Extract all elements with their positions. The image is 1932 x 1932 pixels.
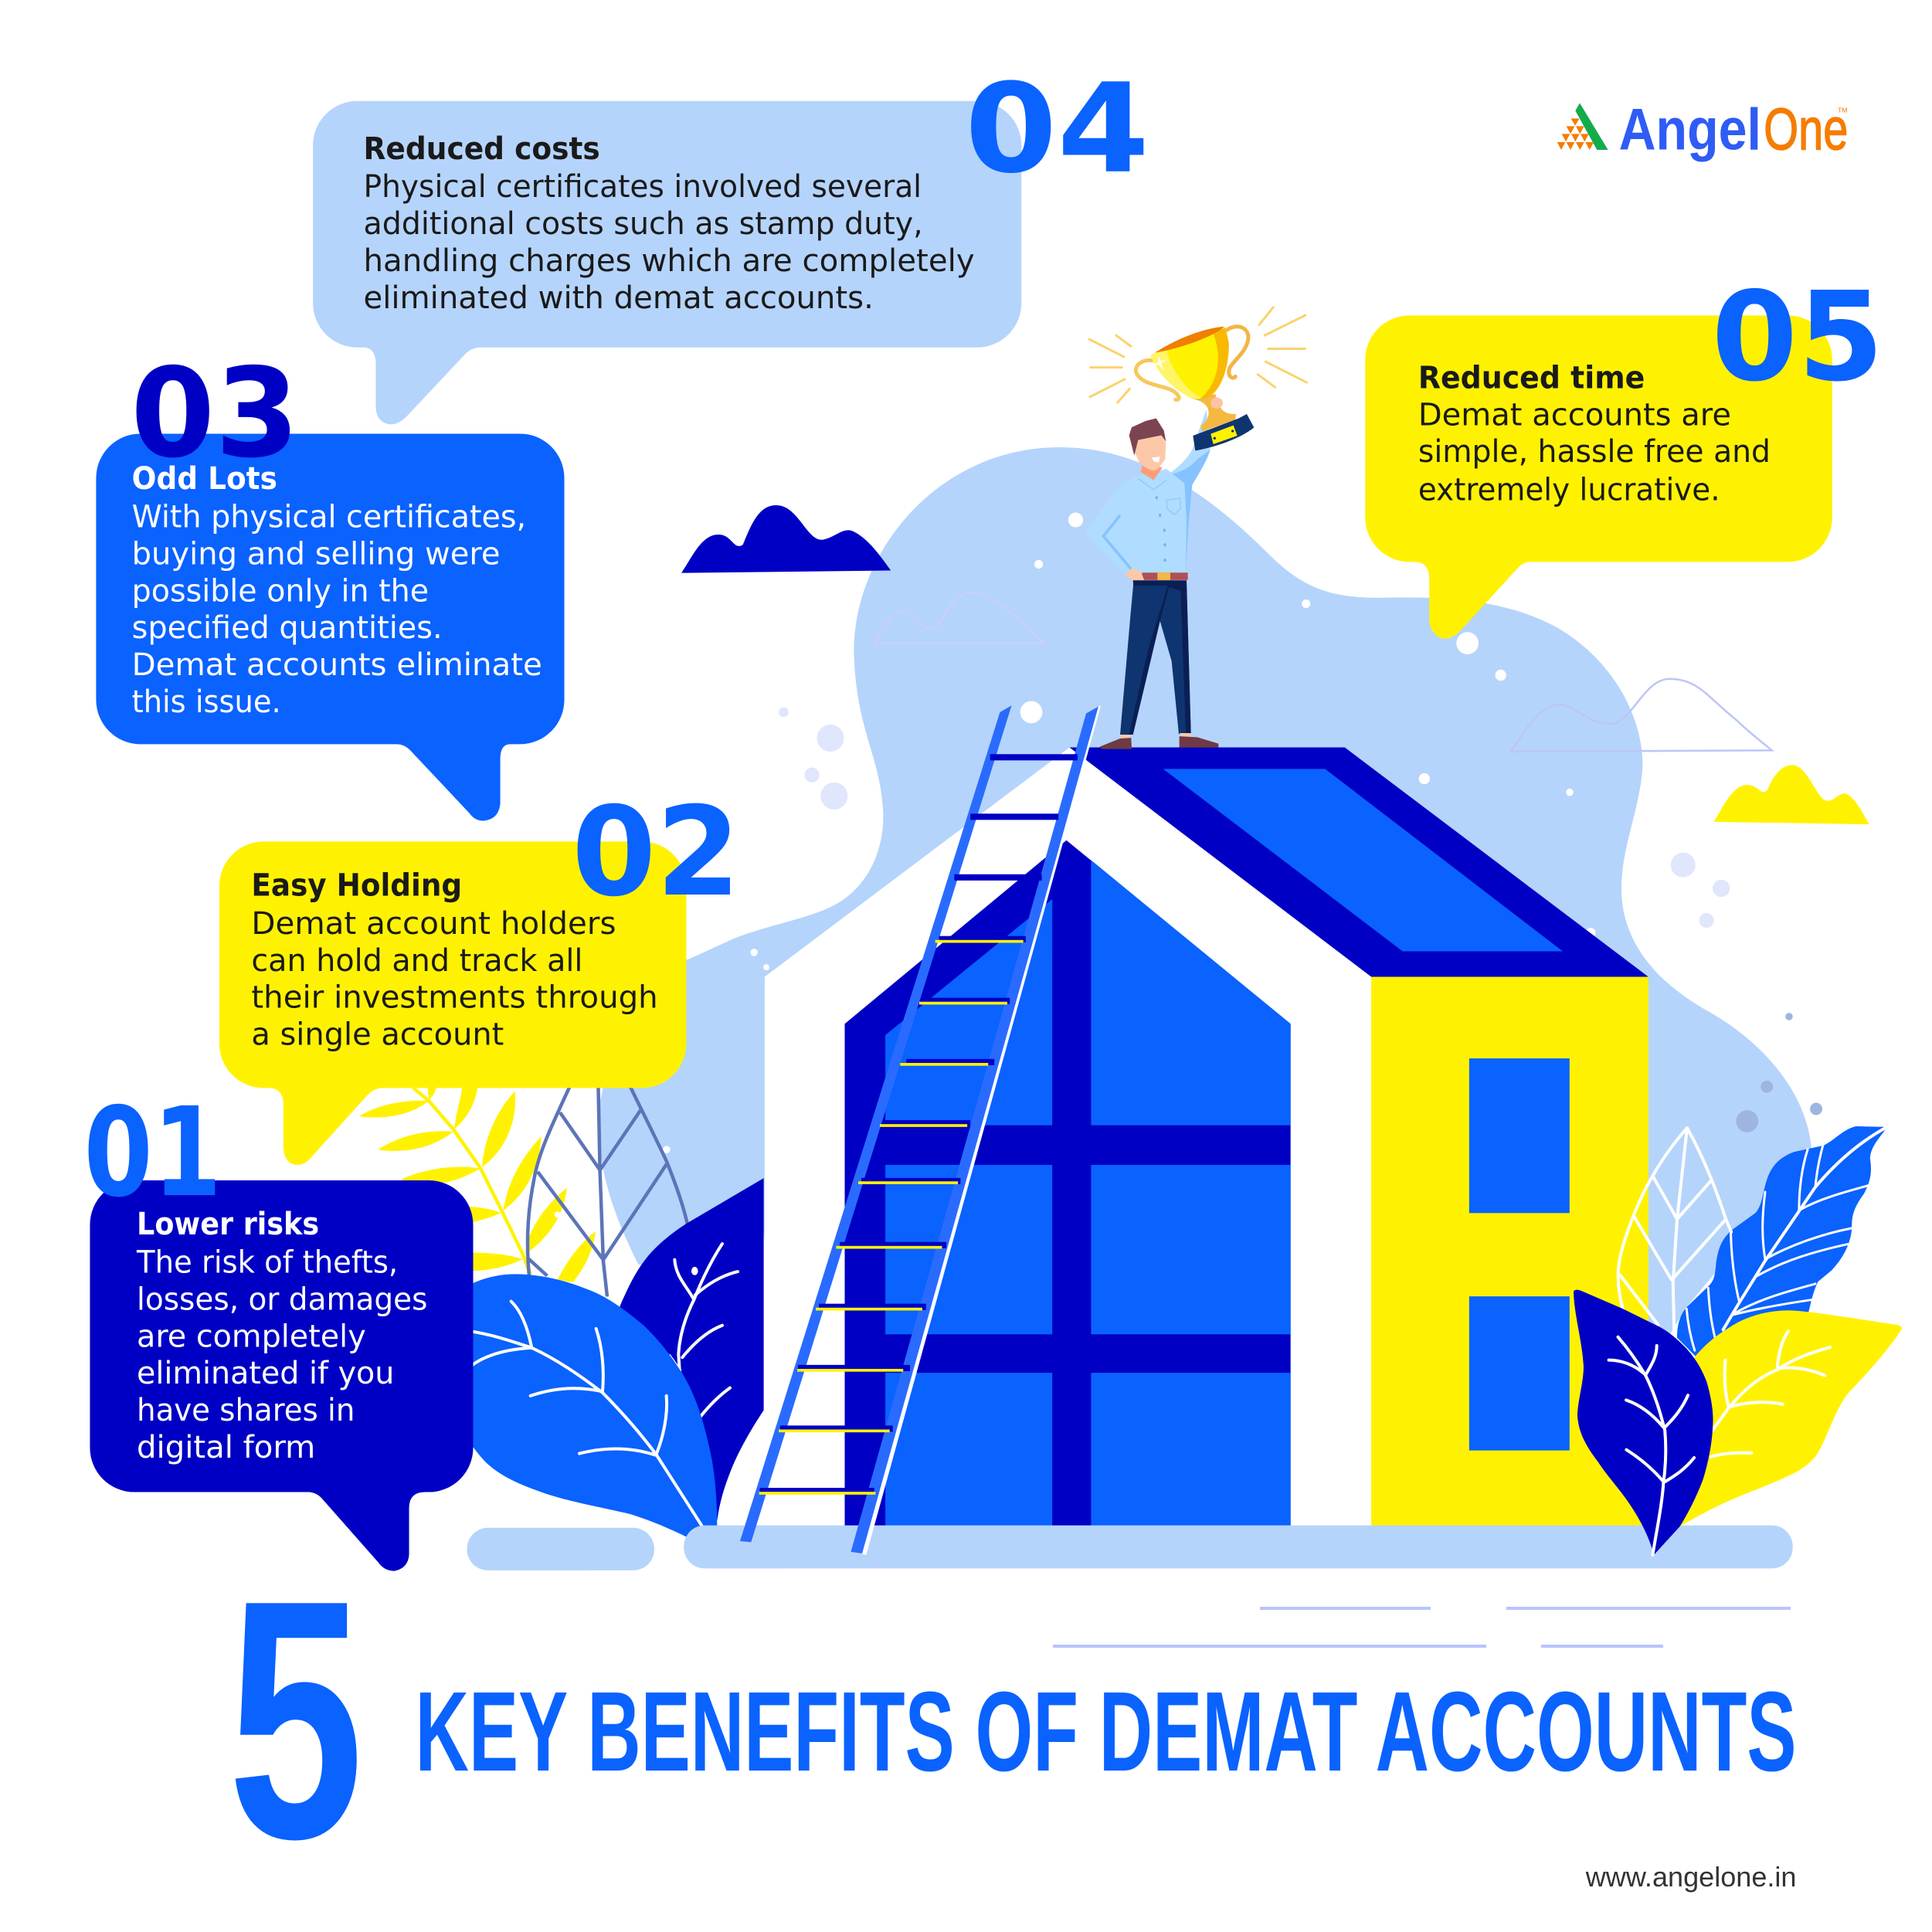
bubble 05: reduced time: Reduced time [1418, 360, 1645, 396]
big numeral 5: 5 [228, 1530, 364, 1910]
bubble 04: reduced costs: 04 [965, 57, 1149, 201]
raised arm [1166, 409, 1210, 485]
website url: www.angelone.in [1585, 1862, 1797, 1893]
bubble 01: lower risks [83, 1081, 473, 1571]
belt [1142, 572, 1188, 580]
bubble 04: reduced costs: Reduced costs [364, 131, 600, 167]
bubble 01: lower risks: losses, or damages [137, 1282, 427, 1317]
house [765, 747, 1648, 1528]
shirt [1084, 469, 1187, 575]
blue feather leaf [1677, 1126, 1887, 1356]
trousers [1120, 582, 1191, 735]
bubble 01: lower risks: eliminated if you [137, 1356, 394, 1391]
bubble 05: reduced time: simple, hassle free and [1418, 434, 1771, 470]
dark cloud [681, 505, 891, 573]
outline cloud right [1510, 679, 1772, 752]
shoes [1120, 733, 1191, 739]
clouds [681, 505, 1869, 824]
logo: Angel One [1557, 97, 1848, 162]
bubble 03: odd lots: Demat accounts eliminate [132, 647, 542, 683]
bubble 02: easy holding: their investments through [251, 980, 658, 1016]
yellow leaf [1669, 1310, 1902, 1526]
outline cloud left [874, 593, 1044, 643]
bubble 02: easy holding: a single account [251, 1017, 504, 1053]
grey outline leaf [528, 1066, 688, 1296]
logo mark [1557, 103, 1608, 150]
bubble 04: reduced costs: additional costs such as stamp duty, [364, 206, 923, 242]
bubble 03: odd lots: Odd Lots [132, 461, 277, 497]
white outline leaf [1618, 1128, 1731, 1338]
ladder [740, 705, 1101, 1555]
bubble 03: odd lots: possible only in the [132, 573, 429, 609]
bubble 03: odd lots [96, 341, 565, 820]
yellow side wall [1371, 976, 1648, 1527]
bubble 02: easy holding: 02 [572, 780, 741, 924]
ground [467, 1526, 1793, 1570]
bubble 01: lower risks: have shares in [137, 1393, 355, 1428]
hand [1126, 568, 1145, 583]
navy leaf [1574, 1290, 1713, 1555]
accent lines [1053, 1607, 1791, 1648]
bubble 01: lower risks: digital form [137, 1430, 315, 1465]
bubble 03: odd lots: this issue. [132, 684, 281, 720]
white house front [765, 747, 1372, 1528]
bubble 04: reduced costs: handling charges which are completely [364, 243, 975, 279]
trophy [1136, 327, 1254, 450]
logo wordmark: One [1764, 97, 1848, 162]
bubble 04: reduced costs: eliminated with demat accounts. [364, 280, 874, 316]
bubble 04: reduced costs: Physical certificates involved several [364, 169, 922, 205]
bubble 01: lower risks: Lower risks [137, 1207, 319, 1242]
bubble 05: reduced time: Demat accounts are [1418, 397, 1731, 433]
bubble 03: odd lots: 03 [131, 341, 300, 485]
bubble 01: lower risks: are completely [137, 1319, 366, 1354]
roof [1069, 747, 1648, 976]
bubble 02: easy holding: can hold and track all [251, 943, 582, 979]
bubble 03: odd lots: With physical certificates, [132, 500, 526, 535]
background blob [599, 447, 1811, 1528]
scattered dots [663, 513, 1822, 1153]
bubble 02: easy holding: Demat account holders [251, 906, 616, 942]
plants right [1574, 1126, 1902, 1555]
window panes [885, 899, 1052, 1126]
bubble 02: easy holding [219, 780, 741, 1165]
bubble 04: reduced costs [313, 57, 1149, 424]
yellow cloud [1714, 765, 1869, 824]
bubble 01: lower risks: 01 [83, 1081, 222, 1224]
side windows [1469, 1058, 1570, 1213]
bubble 02: easy holding: Easy Holding [251, 868, 462, 904]
bubble 01: lower risks: The risk of thefts, [136, 1245, 398, 1281]
roof panel [1163, 769, 1563, 951]
interior dark frame [844, 840, 1291, 1527]
dark blue leaf left [605, 1178, 764, 1521]
trophy rays [1089, 307, 1307, 402]
man holding trophy [1084, 307, 1307, 749]
blue leaf left [450, 1274, 717, 1536]
head [1141, 466, 1163, 480]
bubble 05: reduced time [1365, 265, 1884, 639]
logo wordmark: TM [1838, 107, 1848, 114]
bubble 05: reduced time: extremely lucrative. [1418, 473, 1720, 508]
bubble 03: odd lots: buying and selling were [132, 537, 501, 572]
logo wordmark: Angel [1619, 97, 1761, 162]
bubble 05: reduced time: 05 [1711, 265, 1884, 409]
yellow fern [359, 1087, 596, 1282]
bubble 03: odd lots: specified quantities. [132, 610, 443, 646]
